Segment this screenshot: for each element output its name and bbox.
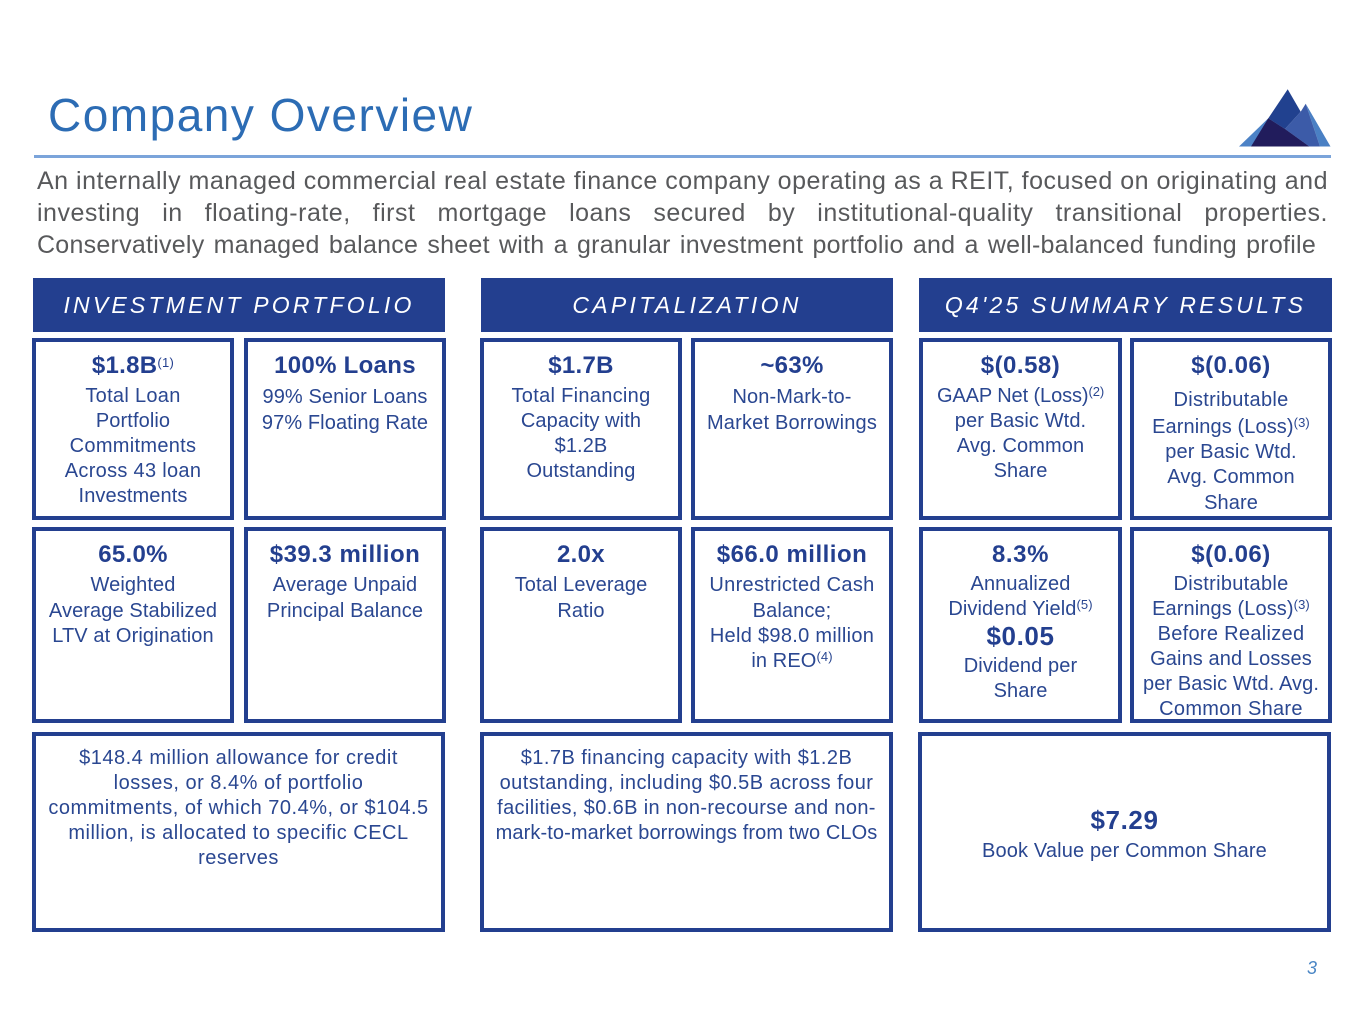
panel: average unpaid principal balance: $39.3 million	[270, 541, 420, 568]
panel: total loan portfolio	[32, 338, 234, 520]
intro text	[37, 167, 1328, 259]
panel: total loan portfolio: Investments	[79, 485, 187, 507]
panel: 100% loans: 99% Senior Loans	[262, 386, 428, 408]
panel: credit loss allowance	[32, 732, 445, 932]
panel: total financing capacity: Outstanding	[527, 460, 635, 482]
panel: total financing capacity: Total Financing	[511, 385, 651, 407]
panel: distributable earnings before gains and losses: Earnings (Loss)(3)	[1152, 597, 1310, 620]
panel: total financing capacity: Capacity with	[521, 410, 641, 432]
panel: distributable earnings before gains and losses: Common Share	[1159, 698, 1303, 720]
panel: book value per share	[918, 732, 1331, 932]
panel: dividend yield and dividend per share: $0.05	[986, 621, 1055, 651]
panel: book value per share: Book Value per Common Share	[982, 840, 1267, 862]
panel: non-mark-to-market: Market Borrowings	[707, 412, 877, 434]
panel: GAAP net loss: Share	[994, 460, 1047, 482]
panel: distributable earnings before gains and losses	[1130, 527, 1332, 723]
panel: book value per share: $7.29	[1090, 805, 1159, 835]
panel: 100% loans	[244, 338, 446, 520]
heading: Q4'25 summary results: Q4'25 SUMMARY RESULTS	[945, 292, 1306, 318]
panel: distributable earnings before gains and losses: Distributable	[1173, 573, 1289, 595]
panel: GAAP net loss: Avg. Common	[957, 435, 1084, 457]
panel: 100% loans: 97% Floating Rate	[262, 412, 428, 434]
panel: total leverage ratio: 2.0x	[557, 541, 605, 568]
panel: average unpaid principal balance: Average Unpaid	[273, 574, 417, 596]
icon: mountain logo	[1239, 89, 1330, 146]
panel: weighted average LTV: Average Stabilized	[49, 600, 217, 622]
panel: dividend yield and dividend per share: Dividend Yield(5)	[948, 597, 1093, 620]
panel: total leverage ratio	[480, 527, 682, 723]
panel: distributable earnings: Share	[1204, 492, 1258, 514]
panel: financing capacity detail: outstanding, including $0.5B across four	[500, 772, 873, 794]
panel: total loan portfolio: Across 43 loan	[65, 460, 201, 482]
heading: capitalization: CAPITALIZATION	[572, 292, 802, 318]
panel: financing capacity detail	[480, 732, 893, 932]
panel: distributable earnings: Distributable	[1173, 389, 1289, 411]
panel: unrestricted cash: Balance;	[753, 600, 831, 622]
title: Company Overview	[48, 89, 473, 141]
panel: average unpaid principal balance: Principal Balance	[267, 600, 423, 622]
panel: GAAP net loss: per Basic Wtd.	[955, 410, 1086, 432]
heading: investment portfolio	[33, 278, 445, 332]
panel: total loan portfolio: Portfolio	[96, 410, 170, 432]
intro text: Conservatively managed balance sheet with a granular investment portfolio and a well-balanced funding profile	[37, 231, 1316, 259]
panel: total loan portfolio: Commitments	[70, 435, 196, 457]
panel: credit loss allowance: $148.4 million allowance for credit	[79, 747, 398, 769]
panel: unrestricted cash	[691, 527, 893, 723]
panel: dividend yield and dividend per share: 8.3%	[992, 541, 1049, 568]
panel: unrestricted cash: in REO(4)	[751, 649, 833, 672]
panel: distributable earnings: per Basic Wtd.	[1165, 441, 1297, 463]
panel: weighted average LTV: LTV at Origination	[52, 625, 214, 647]
panel: non-mark-to-market: ~63%	[760, 352, 824, 379]
panel: distributable earnings before gains and losses: Before Realized	[1158, 623, 1304, 645]
panel: distributable earnings before gains and losses: $(0.06)	[1191, 541, 1271, 568]
panel: unrestricted cash: $66.0 million	[717, 541, 867, 568]
panel: non-mark-to-market	[691, 338, 893, 520]
panel: total loan portfolio: $1.8B(1)	[92, 352, 174, 379]
panel: financing capacity detail: $1.7B financing capacity with $1.2B	[521, 747, 852, 769]
panel: 100% loans: 100% Loans	[274, 352, 416, 379]
panel: dividend yield and dividend per share: Dividend per	[964, 655, 1077, 677]
panel: GAAP net loss	[919, 338, 1122, 520]
panel: total financing capacity: $1.2B	[555, 435, 607, 457]
panel: distributable earnings before gains and losses: per Basic Wtd. Avg.	[1143, 673, 1319, 695]
panel: total loan portfolio: Total Loan	[85, 385, 181, 407]
panel: unrestricted cash: Unrestricted Cash	[709, 574, 875, 596]
panel: credit loss allowance: million, is allocated to specific CECL	[68, 822, 409, 844]
panel: distributable earnings	[1130, 338, 1332, 520]
panel: distributable earnings: Earnings (Loss)(3)	[1152, 415, 1310, 438]
panel: financing capacity detail: facilities, $0.6B in non-recourse and non-	[497, 797, 876, 819]
panel: dividend yield and dividend per share: Share	[994, 680, 1047, 702]
panel: financing capacity detail: mark-to-market borrowings from two CLOs	[496, 822, 877, 844]
heading: Q4'25 summary results	[919, 278, 1332, 332]
panel: dividend yield and dividend per share	[919, 527, 1122, 723]
panel: weighted average LTV: 65.0%	[98, 541, 168, 568]
panel: total financing capacity: $1.7B	[548, 352, 614, 379]
panel: total leverage ratio: Ratio	[557, 600, 605, 622]
heading: capitalization	[481, 278, 893, 332]
panel: unrestricted cash: Held $98.0 million	[710, 625, 874, 647]
panel: GAAP net loss: $(0.58)	[981, 352, 1060, 379]
panel: credit loss allowance: losses, or 8.4% of portfolio	[114, 772, 363, 794]
panel: distributable earnings: Avg. Common	[1167, 466, 1295, 488]
panel: total financing capacity	[480, 338, 682, 520]
panel: non-mark-to-market: Non-Mark-to-	[732, 386, 852, 408]
panel: credit loss allowance: reserves	[198, 847, 279, 869]
panel: total leverage ratio: Total Leverage	[515, 574, 647, 596]
page number: 3	[1307, 958, 1317, 978]
intro text: investing in floating-rate, first mortgage loans secured by institutional-quality transitional properties.	[37, 199, 1328, 227]
panel: weighted average LTV	[32, 527, 234, 723]
panel: distributable earnings: $(0.06)	[1191, 352, 1271, 379]
panel: weighted average LTV: Weighted	[91, 574, 175, 596]
panel: dividend yield and dividend per share: Annualized	[971, 573, 1070, 595]
heading: investment portfolio: INVESTMENT PORTFOLIO	[63, 292, 415, 318]
panel: GAAP net loss: GAAP Net (Loss)(2)	[937, 384, 1104, 407]
intro text: An internally managed commercial real estate finance company operating as a REIT, focused on originating and	[37, 167, 1328, 195]
panel: distributable earnings before gains and losses: Gains and Losses	[1150, 648, 1312, 670]
panel: credit loss allowance: commitments, of which 70.4%, or $104.5	[48, 797, 429, 819]
panel: average unpaid principal balance	[244, 527, 446, 723]
